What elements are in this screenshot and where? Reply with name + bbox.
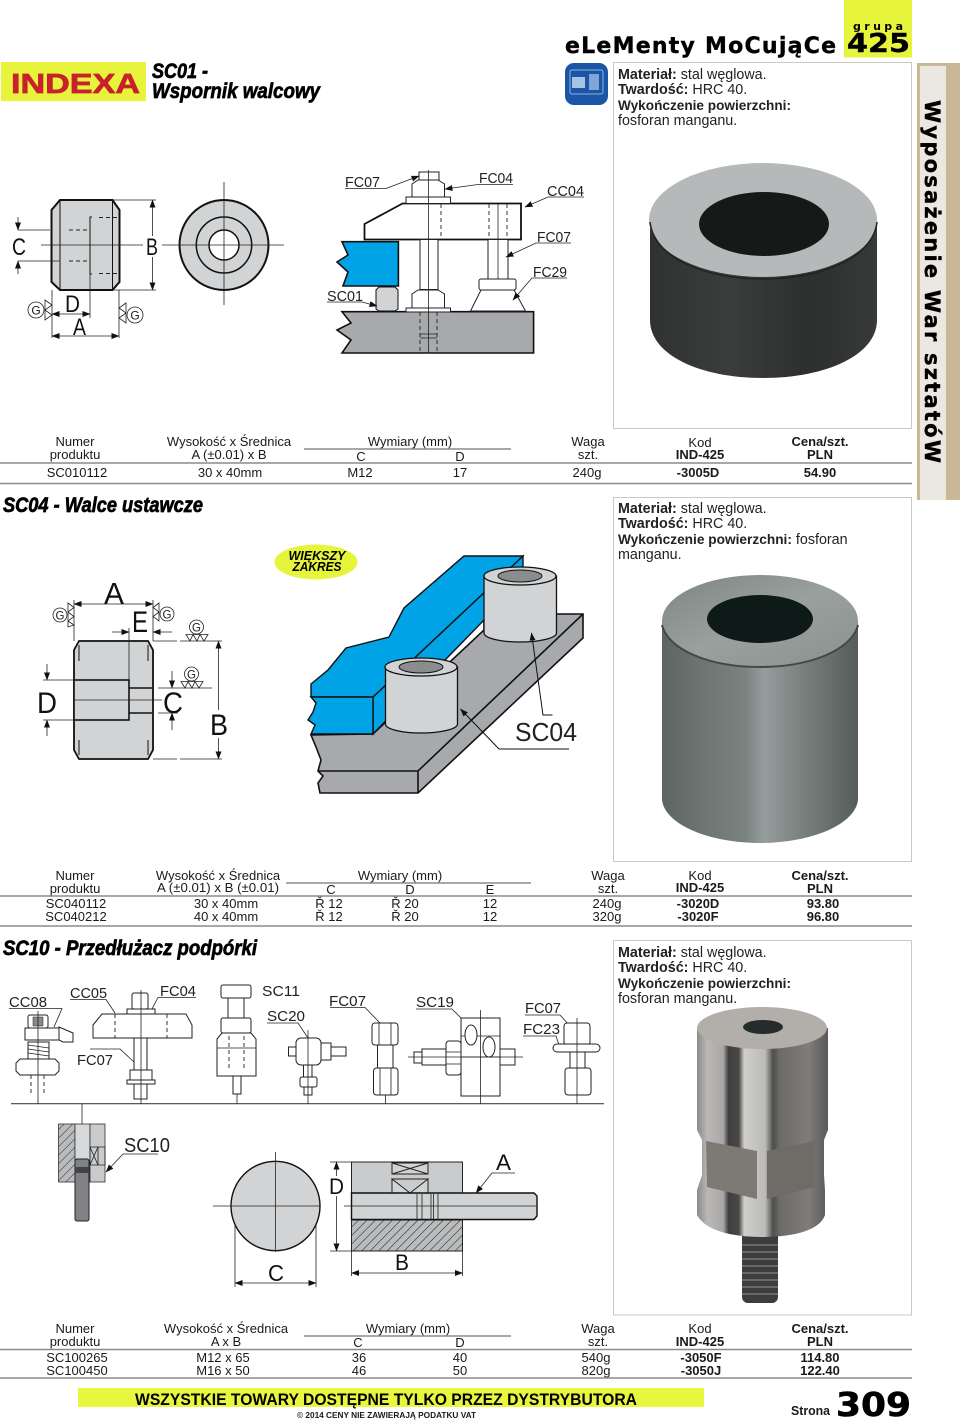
group badge 425: 425	[847, 29, 910, 59]
table header: IND-425	[676, 1334, 724, 1349]
table header: szt.	[588, 1334, 608, 1349]
table rows: Ř 20	[391, 909, 419, 924]
dimension letters	[12, 234, 158, 341]
group badge 425: grupa	[853, 20, 903, 33]
surface symbols G	[53, 603, 208, 688]
badge: większy zakres: ZAKRES	[292, 560, 342, 574]
table rows: 46	[352, 1363, 366, 1378]
table header: Cena/szt.	[791, 434, 849, 449]
title: SC01	[152, 60, 321, 103]
base plate	[311, 614, 583, 793]
table header: IND-425	[676, 880, 724, 895]
table rows: 540g	[582, 1350, 610, 1365]
surface symbols G: G	[31, 304, 41, 318]
table rows: 114.80	[800, 1350, 840, 1365]
table row: 240g	[573, 465, 601, 480]
table header: Wysokość x Średnica	[167, 434, 292, 449]
label SC10: SC10	[124, 1135, 170, 1157]
material text	[618, 67, 791, 129]
part: FC07: FC07	[329, 993, 366, 1010]
table rows: 12	[483, 896, 497, 911]
table rows: SC040212	[45, 909, 107, 924]
part: CC08: CC08	[9, 994, 47, 1011]
table header	[50, 1321, 849, 1350]
surface symbols G: G	[163, 610, 172, 622]
surface symbols G: G	[192, 622, 201, 634]
table rows: 93.80	[807, 896, 839, 911]
base plate	[337, 312, 534, 353]
material text: fosforan manganu.	[618, 991, 737, 1007]
assembly labels: FC07	[537, 229, 571, 246]
table header: produktu	[50, 881, 100, 896]
table rows: SC100265	[46, 1350, 108, 1365]
table header: Numer	[55, 434, 95, 449]
page number: Strona	[791, 1404, 831, 1418]
table rows: 240g	[593, 896, 621, 911]
table header: Waga	[581, 1321, 616, 1336]
table header: PLN	[807, 881, 833, 896]
table header: C	[356, 449, 366, 464]
table header: Waga	[571, 434, 606, 449]
badge: większy zakres	[274, 544, 358, 580]
table row: -3005D	[677, 465, 719, 480]
part: SC11	[217, 983, 300, 1104]
diagram: SC04 3D setup	[308, 556, 583, 793]
assembly labels: CC04	[547, 183, 584, 200]
table rows: M16 x 50	[196, 1363, 250, 1378]
table rows: SC100450	[46, 1363, 108, 1378]
table: SC04	[0, 868, 912, 926]
table header: Kod	[688, 1321, 712, 1336]
SC01 small cylinder	[376, 287, 398, 311]
material text: Twardość: HRC 40.	[618, 82, 747, 98]
blue beam	[308, 556, 523, 734]
dimension letters: A	[104, 576, 124, 611]
table rows: 40 x 40mm	[194, 909, 258, 924]
label SC04 with leaders: SC04	[515, 717, 577, 747]
table header: produktu	[50, 447, 100, 462]
table header: A (±0.01) x B	[191, 447, 267, 462]
table rows	[46, 1350, 840, 1378]
sidebar: Wyposażenie warsztatów: Wyposażenie War sztatóW	[920, 100, 944, 463]
drawing: SC04 dimensions	[37, 576, 228, 759]
part: FC07 FC23: FC07	[525, 1000, 561, 1017]
table rows: Ř 12	[315, 909, 343, 924]
dimension letters: A	[496, 1150, 511, 1175]
table header: Cena/szt.	[791, 1321, 849, 1336]
dimension letters	[329, 1150, 511, 1275]
table header: PLN	[807, 1334, 833, 1349]
drawing: SC10 front view	[213, 1152, 320, 1287]
table rows: -3050J	[681, 1363, 721, 1378]
table row: 30 x 40mm	[198, 465, 262, 480]
part: CC05: CC05	[70, 985, 107, 1002]
photo: steel cylinder	[662, 575, 858, 843]
table header: Wysokość x Średnica	[164, 1321, 289, 1336]
table rows: 36	[352, 1350, 366, 1365]
material text: Wykończenie powierzchni: fosforan	[618, 532, 848, 548]
bolt and nuts	[406, 170, 450, 353]
adjustable support	[470, 204, 526, 311]
table row: 17	[453, 465, 467, 480]
part: SC19	[408, 994, 523, 1104]
dimension letters: C	[12, 234, 26, 261]
cylinder right	[484, 567, 556, 642]
table: SC01	[0, 434, 912, 484]
drawing: SC01 front view rings	[162, 182, 284, 305]
table header: E	[486, 882, 495, 897]
material text: Wykończenie powierzchni:	[618, 98, 791, 113]
table rows: 40	[453, 1350, 467, 1365]
dimension letters: B	[210, 709, 228, 742]
table header: D	[405, 882, 415, 897]
drawing: SC01 dimensions side view	[12, 200, 158, 341]
table rows: 12	[483, 909, 497, 924]
table rows: -3020F	[677, 909, 719, 924]
table rows	[45, 896, 839, 924]
assembly labels: FC07	[345, 174, 380, 191]
dimension letters: D	[37, 687, 57, 720]
material text: Materiał: stal węglowa.	[618, 945, 767, 961]
table row: M12	[347, 465, 373, 480]
table header: Numer	[55, 868, 95, 883]
table rows: 122.40	[800, 1363, 840, 1378]
dimension letters: B	[395, 1250, 409, 1275]
table rows: 30 x 40mm	[194, 896, 258, 911]
table header: A (±0.01) x B (±0.01)	[157, 880, 279, 895]
table header: Wymiary (mm)	[366, 1321, 450, 1336]
table header: Kod	[688, 868, 712, 883]
dimension letters: D	[329, 1174, 344, 1199]
table rows: 50	[453, 1363, 467, 1378]
badge: większy zakres: WIĘKSZY	[288, 549, 347, 563]
table header: Waga	[591, 868, 626, 883]
dimension letters: A	[73, 314, 86, 341]
part: FC07 FC23	[523, 1000, 600, 1104]
part: CC05: FC07	[77, 1052, 113, 1069]
part: SC19: SC19	[416, 994, 454, 1011]
table rows: -3050F	[680, 1350, 722, 1365]
material text: Twardość: HRC 40.	[618, 960, 747, 976]
assembly labels	[327, 170, 584, 305]
dimension letters	[37, 576, 228, 742]
title: SC01: SC01 -	[152, 60, 208, 83]
panel: SC10 product	[614, 940, 912, 1315]
panel: SC04 product	[614, 498, 912, 862]
table rows: M12 x 65	[196, 1350, 250, 1365]
dimension letters: D	[65, 291, 80, 318]
part: SC20: SC20	[267, 1008, 305, 1025]
surface symbols G: G	[187, 670, 196, 682]
table header: PLN	[807, 447, 833, 462]
part: FC07	[329, 993, 398, 1104]
table header: IND-425	[676, 447, 724, 462]
table rows: Ř 20	[391, 896, 419, 911]
dimension letters: B	[146, 234, 158, 261]
part: CC08	[9, 994, 73, 1104]
table rows: Ř 12	[315, 896, 343, 911]
table row: 54.90	[804, 465, 836, 480]
drawing: SC10 section view	[58, 1104, 170, 1221]
assembly labels: FC04	[479, 170, 513, 187]
clamp	[364, 204, 521, 240]
label SC04 with leaders	[460, 633, 577, 749]
footer: distributor banner: © 2014 CENY NIE ZAWIERAJĄ PODATKU VAT	[297, 1410, 477, 1420]
table header: Numer	[55, 1321, 95, 1336]
table header: D	[455, 1335, 465, 1350]
table header: produktu	[50, 1334, 100, 1349]
footer: distributor banner	[78, 1388, 704, 1420]
dimension letters: E	[132, 606, 148, 639]
diagram: SC01 clamp assembly	[327, 170, 584, 353]
material text	[618, 501, 848, 563]
table header: Wymiary (mm)	[368, 434, 452, 449]
surface symbols G: G	[56, 610, 65, 622]
panel: SC01 product	[614, 62, 912, 428]
blue workpiece	[337, 242, 398, 286]
part: CC05	[70, 983, 196, 1104]
page number	[791, 1385, 911, 1420]
part: FC07 FC23: FC23	[523, 1021, 560, 1038]
surface symbols G: G	[130, 308, 140, 322]
dimension letters: C	[163, 687, 183, 720]
table row	[47, 465, 836, 480]
group badge 425	[844, 0, 912, 59]
title: SC04: SC04 - Walce ustawcze	[3, 494, 203, 517]
table rows: 96.80	[807, 909, 839, 924]
table header: szt.	[598, 881, 618, 896]
material text: Materiał: stal węglowa.	[618, 67, 767, 83]
cylinder left	[385, 658, 458, 733]
part: CC05: FC04	[160, 983, 196, 1000]
material text: manganu.	[618, 547, 682, 563]
table header: Cena/szt.	[791, 868, 849, 883]
assembly labels: FC29	[533, 264, 567, 281]
surface symbols G	[28, 300, 143, 323]
assembly leaders	[327, 176, 584, 306]
photo: black ring	[649, 163, 877, 378]
footer: distributor banner: WSZYSTKIE TOWARY DOSTĘPNE TYLKO PRZEZ DYSTRYBUTORA	[135, 1391, 637, 1409]
part: SC20	[267, 1008, 346, 1104]
photo: threaded extension	[697, 1007, 828, 1303]
table rows: 820g	[582, 1363, 610, 1378]
table header: szt.	[578, 447, 598, 462]
diagram: SC10 assembly parts row	[9, 983, 604, 1104]
section heading: elementy mocujące: eLeMenty MoCująCe	[565, 34, 836, 59]
table rows: 320g	[593, 909, 621, 924]
material text	[618, 945, 791, 1007]
title: SC10: SC10 - Przedłużacz podpórki	[3, 937, 258, 960]
sidebar: Wyposażenie warsztatów	[917, 63, 960, 500]
drawing: SC10 front view: C	[268, 1260, 284, 1286]
table header: Wymiary (mm)	[358, 868, 442, 883]
icon: blue machine tile	[565, 63, 608, 105]
table header: Kod	[688, 435, 712, 450]
table rows: -3020D	[677, 896, 719, 911]
logo: INDEXA	[1, 62, 146, 101]
drawing: SC10 longitudinal section	[329, 1150, 537, 1276]
logo: INDEXA: INDEXA	[11, 68, 140, 99]
assembly labels: SC01	[327, 288, 363, 305]
part: SC11: SC11	[262, 983, 300, 1000]
table header: A x B	[211, 1334, 241, 1349]
table header	[50, 434, 849, 464]
table: SC10	[0, 1321, 912, 1378]
table header: D	[455, 449, 465, 464]
material text: fosforan manganu.	[618, 113, 737, 129]
table row: SC010112	[47, 465, 107, 480]
table header: C	[326, 882, 336, 897]
material text: Wykończenie powierzchni:	[618, 976, 791, 991]
table header	[50, 868, 849, 897]
table rows: SC040112	[46, 896, 106, 911]
title: SC01: Wspornik walcowy	[152, 80, 321, 103]
table header: C	[353, 1335, 363, 1350]
table header: Wysokość x Średnica	[156, 868, 281, 883]
material text: Twardość: HRC 40.	[618, 516, 747, 532]
material text: Materiał: stal węglowa.	[618, 501, 767, 517]
